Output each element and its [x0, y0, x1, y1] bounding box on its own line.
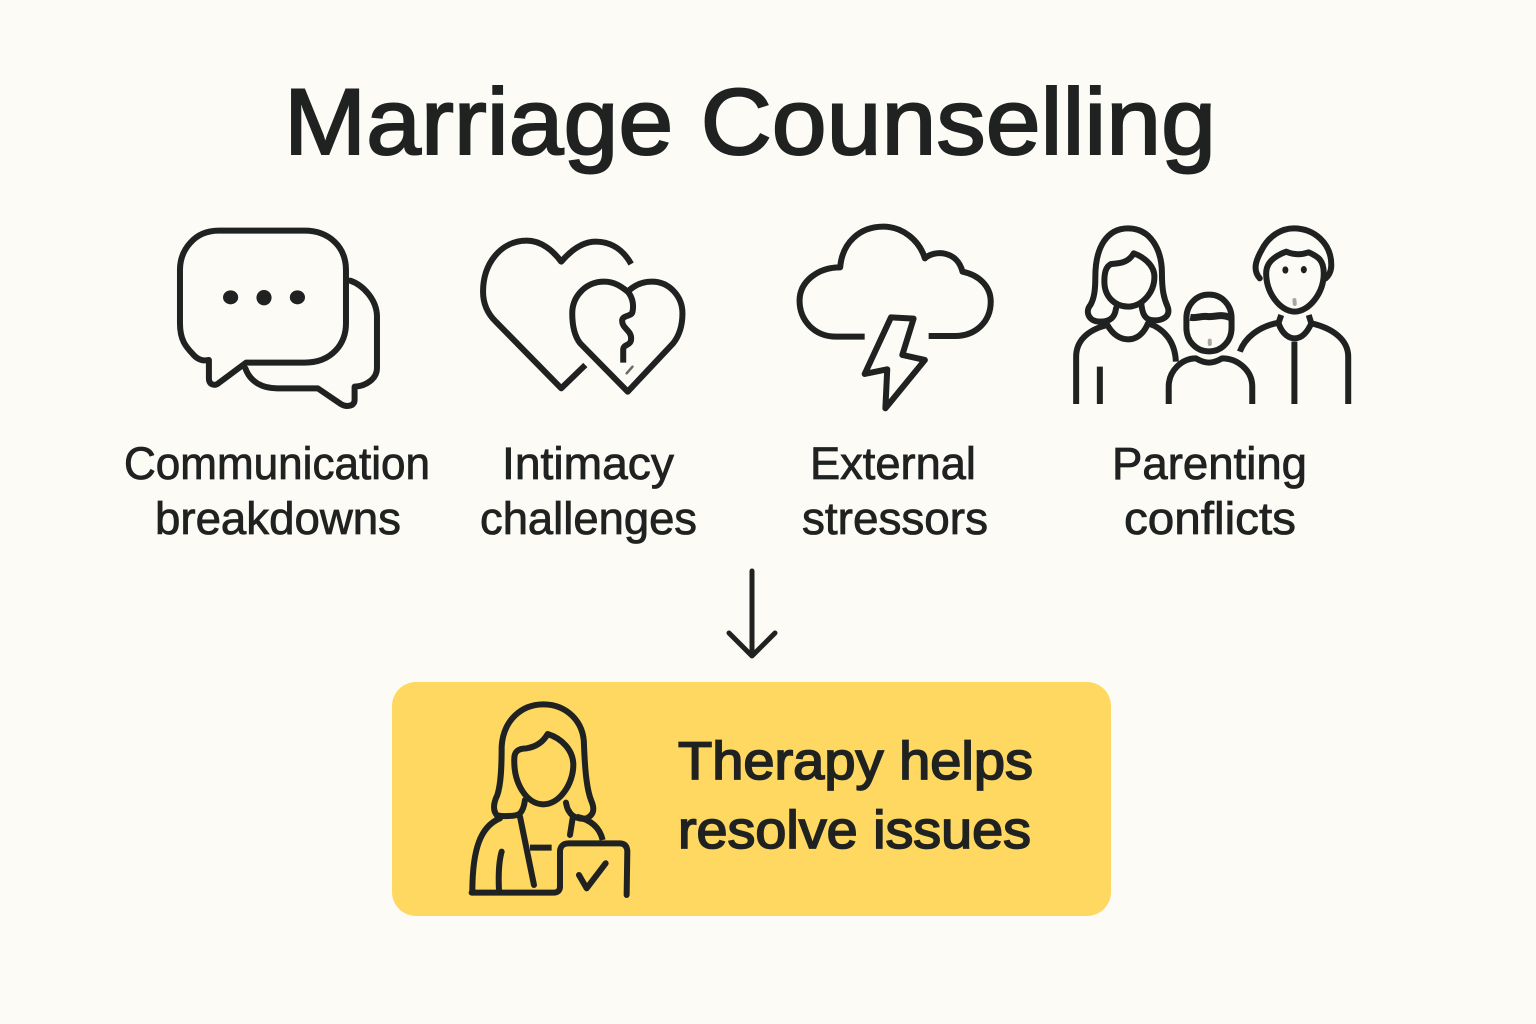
callout text — [678, 732, 1033, 860]
label: communication breakdowns — [124, 438, 430, 544]
callout text: resolve issues — [678, 801, 1031, 860]
label: communication breakdowns: breakdowns — [155, 493, 401, 544]
label: intimacy challenges: Intimacy — [502, 438, 675, 489]
icon: whole heart and broken heart — [483, 241, 682, 392]
label: parenting conflicts: conflicts — [1124, 493, 1296, 544]
label: intimacy challenges: challenges — [480, 493, 697, 544]
label: communication breakdowns: Communication — [124, 438, 430, 489]
woman — [1076, 228, 1176, 404]
panel: therapy callout — [392, 682, 1111, 916]
icon: therapist with checkmark — [472, 704, 627, 895]
title: Marriage Counselling — [284, 69, 1216, 174]
label: parenting conflicts — [1112, 438, 1307, 544]
label: intimacy challenges — [480, 438, 697, 544]
label: external stressors: stressors — [802, 493, 988, 544]
child — [1169, 295, 1252, 404]
icon: storm cloud with lightning bolt — [800, 227, 991, 408]
label: external stressors — [802, 438, 988, 544]
callout background — [392, 682, 1111, 916]
icon: family of three — [1076, 228, 1348, 404]
label: parenting conflicts: Parenting — [1112, 438, 1307, 489]
callout text: Therapy helps — [678, 732, 1033, 791]
arrow: down to therapy — [729, 571, 775, 656]
label: external stressors: External — [810, 438, 976, 489]
man — [1240, 228, 1348, 404]
icon: speech bubbles — [180, 231, 377, 406]
